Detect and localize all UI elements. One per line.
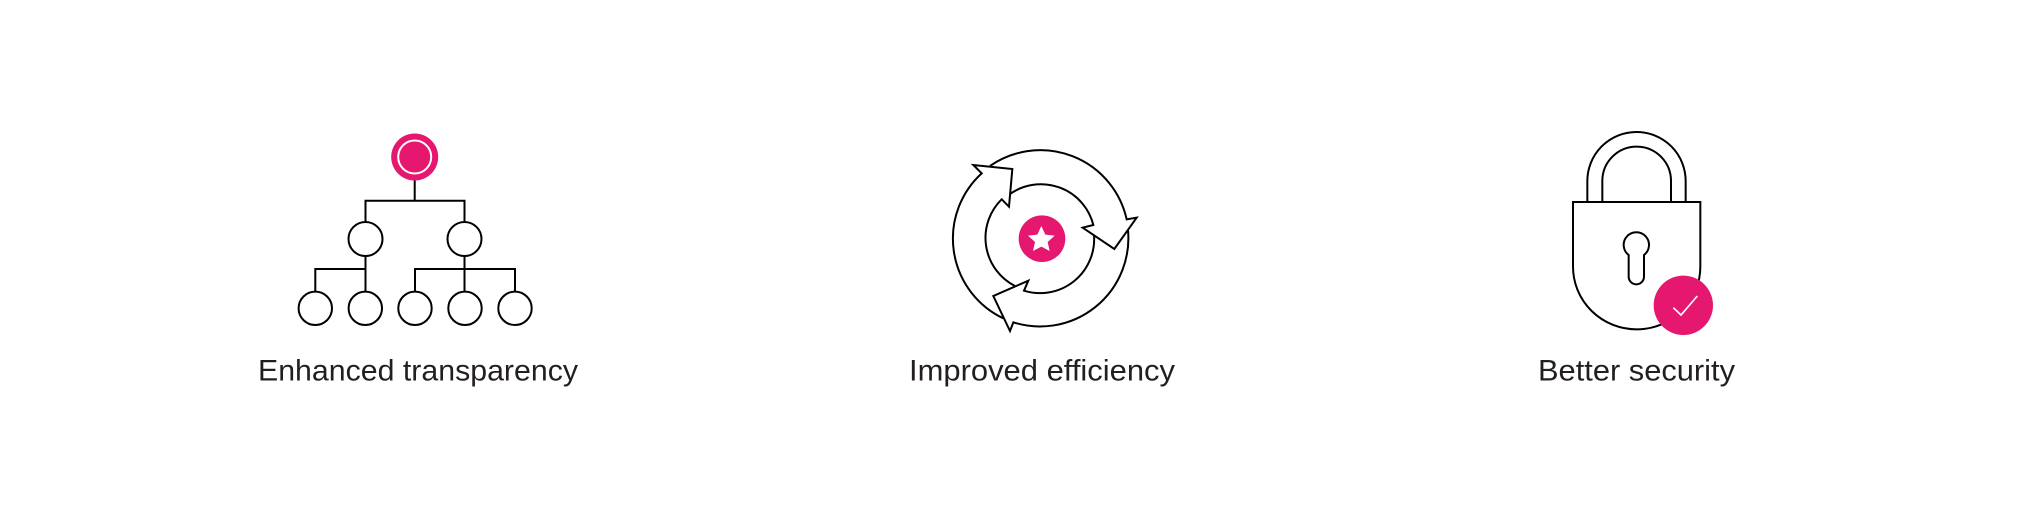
arrow: left [953, 165, 1015, 318]
center badge [1019, 215, 1065, 262]
label: improved efficiency: Improved efficiency [909, 354, 1175, 388]
label: enhanced transparency: Enhanced transparency [258, 354, 578, 388]
middle nodes [348, 222, 482, 256]
panel: enhanced transparency [258, 134, 578, 388]
shackle [1587, 132, 1686, 202]
check badge [1654, 276, 1713, 335]
icon: hierarchy tree [299, 134, 532, 325]
arrow: bottom [993, 230, 1128, 331]
icon: star [1028, 226, 1055, 251]
icon: check mark [1673, 296, 1697, 315]
tree connectors [315, 180, 515, 292]
arrow: top right [990, 150, 1137, 249]
panel: better security [1538, 132, 1735, 388]
lock body [1573, 202, 1700, 329]
keyhole [1624, 232, 1649, 284]
icon: circular arrows with star [953, 150, 1137, 331]
label: better security: Better security [1538, 354, 1735, 388]
icon: padlock with check [1573, 132, 1713, 335]
top node [391, 134, 438, 180]
bottom nodes [299, 292, 532, 325]
panel: improved efficiency [909, 150, 1175, 388]
